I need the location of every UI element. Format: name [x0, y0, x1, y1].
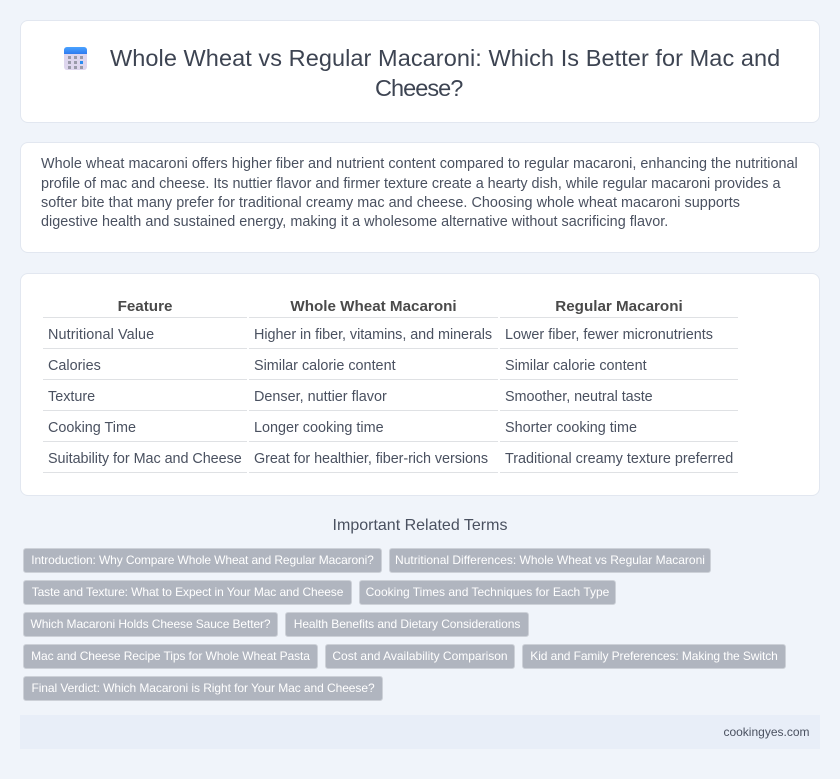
intro text: Whole wheat macaroni offers higher fiber and nutrient content compared to regular macaroni, enhancing the nutritional — [41, 156, 798, 172]
comparison table: Suitability for Mac and Cheese — [48, 451, 242, 467]
related term tags: Health Benefits and Dietary Considerations — [294, 617, 520, 631]
related term tags: Final Verdict: Which Macaroni is Right for Your Mac and Cheese? — [31, 681, 375, 695]
comparison table: Feature — [118, 298, 172, 315]
comparison table: Traditional creamy texture preferred — [505, 451, 733, 467]
related term tags: Kid and Family Preferences: Making the Switch — [530, 649, 778, 663]
panel: intro text card — [20, 142, 820, 253]
related term tags: Cost and Availability Comparison — [332, 649, 508, 663]
related term tags: Which Macaroni Holds Cheese Sauce Better? — [30, 617, 271, 631]
panel: title card — [20, 20, 820, 123]
intro text: digestive health and sustained energy, making it a wholesome alternative without sacrificing flavor. — [41, 214, 668, 230]
footer source: cookingyes.com — [723, 725, 810, 739]
comparison table: Similar calorie content — [505, 358, 647, 374]
comparison table: Shorter cooking time — [505, 420, 637, 436]
comparison table: Higher in fiber, vitamins, and minerals — [254, 327, 492, 343]
related term tags: Cooking Times and Techniques for Each Type — [366, 585, 609, 599]
comparison table — [43, 298, 738, 473]
title: Cheese? — [375, 75, 462, 101]
title — [110, 45, 780, 101]
panel: comparison table card — [20, 273, 820, 496]
related term tags: Introduction: Why Compare Whole Wheat and Regular Macaroni? — [31, 553, 374, 567]
comparison table: Similar calorie content — [254, 358, 396, 374]
intro text: profile of mac and cheese. Its nuttier flavor and firmer texture create a hearty dish, while regular macaroni provides a — [41, 176, 780, 192]
title: Whole Wheat vs Regular Macaroni: Which Is Better for Mac and — [110, 45, 780, 71]
comparison table: Nutritional Value — [48, 327, 154, 343]
comparison table: Smoother, neutral taste — [505, 389, 653, 405]
comparison table: Calories — [48, 358, 101, 374]
heading: related terms: Important Related Terms — [333, 517, 507, 534]
comparison table: Lower fiber, fewer micronutrients — [505, 327, 713, 343]
intro text: softer bite that many prefer for traditional creamy mac and cheese. Choosing whole wheat macaroni supports — [41, 195, 740, 211]
comparison table: Great for healthier, fiber-rich versions — [254, 451, 488, 467]
comparison table: Cooking Time — [48, 420, 136, 436]
intro text — [41, 156, 798, 230]
related term tags: Nutritional Differences: Whole Wheat vs Regular Macaroni — [395, 553, 705, 567]
related term tags — [23, 548, 786, 701]
comparison table: Whole Wheat Macaroni — [290, 298, 457, 315]
comparison table: Denser, nuttier flavor — [254, 389, 387, 405]
icon: calendar — [64, 47, 87, 70]
related term tags: Mac and Cheese Recipe Tips for Whole Wheat Pasta — [31, 649, 310, 663]
comparison table: Longer cooking time — [254, 420, 384, 436]
footer bar — [20, 715, 820, 749]
related term tags: Taste and Texture: What to Expect in Your Mac and Cheese — [32, 585, 343, 599]
comparison table: Texture — [48, 389, 95, 405]
comparison table: Regular Macaroni — [555, 298, 683, 315]
